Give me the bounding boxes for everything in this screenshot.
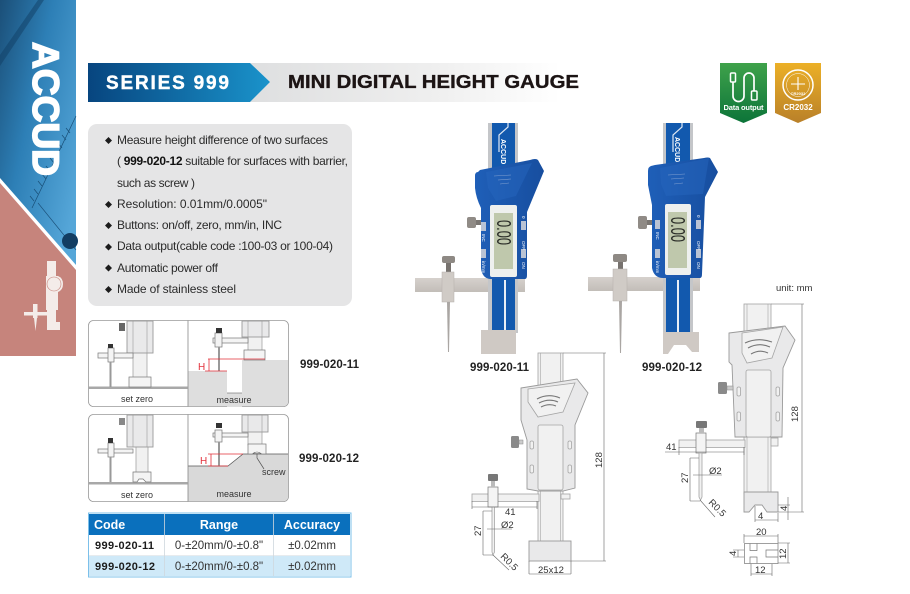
feature list: Made of stainless steel [117,282,236,296]
product photo: 999-020-11: ON [521,262,526,269]
feature list: Measure height difference of two surfaces [117,133,328,147]
dimensions [472,353,606,576]
table row 1: ±0.02mm [288,540,336,552]
table row 2 [95,561,336,573]
series banner: SERIES 999 [106,73,229,94]
table row 1: 0-±20mm/0-±0.8" [175,540,263,552]
technical drawing: 999-020-12 [665,304,804,576]
dimensions: 25x12 [538,565,564,576]
product photo: 999-020-11: in/mm [481,261,486,274]
feature badge: CR2032 battery: CR2032 [791,91,806,96]
product photo: 999-020-12: 0 [696,215,701,218]
measure gauge with screw: measure [216,489,252,499]
sidebar brand strip [0,0,78,356]
panel: usage diagram 999-020-12 [88,414,288,502]
product photo: 999-020-12 [588,123,718,354]
measure gauge with height H: measure [216,395,252,405]
dimensions: 12 [778,548,789,559]
table header: Code [94,518,125,532]
panel: features [88,124,352,306]
label: photo 999-020-11: 999-020-11 [470,362,530,374]
measure gauge with screw: H [200,456,207,467]
set zero gauge [88,415,188,500]
dimensions: 41 [666,442,677,453]
feature list: Automatic power off [117,261,219,275]
product photo: 999-020-12: 0.00 [666,217,688,242]
feature badge: CR2032 battery [775,63,821,123]
feature list: Data output(cable code :100-03 or 100-04) [117,239,333,253]
logo: ACCUD: ACCUD [25,42,66,176]
dimensions: R0.5 [706,497,728,519]
dimensions: R0.5 [498,551,520,573]
feature list: ( 999-020-12 suitable for surfaces with barrier, [117,154,348,168]
dimensions: 4 [728,551,739,556]
product photo: 999-020-11: ACCUD [499,139,506,164]
set zero gauge [88,321,188,404]
table header: Accuracy [284,518,340,532]
dimensions: 27 [473,525,484,536]
dimensions: 20 [756,527,767,538]
measure gauge with screw: screw [262,467,286,477]
dimensions: 27 [680,472,691,483]
table row 2: ±0.02mm [288,561,336,573]
table row 1: 999-020-11 [95,540,154,552]
dimensions: Ø2 [709,466,722,477]
set zero gauge: set zero [121,490,153,500]
feature badge: data output: Data output [724,103,764,112]
unit note: unit: mm [776,283,813,294]
product photo: 999-020-12: INC [655,232,660,240]
label: 999-020-12: 999-020-12 [299,453,359,465]
dimensions: 128 [594,452,605,468]
table row 1 [95,540,336,552]
measure gauge with screw [200,415,286,499]
product photo: 999-020-12: in/mm [655,261,660,274]
product photo: 999-020-12: OFF [696,241,701,250]
dimensions: Ø2 [501,520,514,531]
table row 2: 0-±20mm/0-±0.8" [175,561,263,573]
set zero gauge: set zero [121,394,153,404]
dimensions: 128 [790,406,801,422]
dimensions [665,304,804,576]
product photo: 999-020-11: 0 [521,216,526,219]
product photo: 999-020-12: ON [696,262,701,269]
dimensions: 4 [779,506,790,511]
product photo: 999-020-11: OFF [521,241,526,250]
label: photo 999-020-12: 999-020-12 [642,362,702,374]
product photo: 999-020-11: 0.00 [492,220,514,245]
feature list: such as screw ) [117,176,195,190]
label: 999-020-11: 999-020-11 [300,359,360,371]
icon: height gauge silhouette [24,261,63,331]
feature list: Buttons: on/off, zero, mm/in, INC [117,218,282,232]
feature badge: data output [720,63,767,123]
panel: usage diagram 999-020-11 [88,320,288,407]
feature list: Resolution: 0.01mm/0.0005" [117,197,267,211]
top view of base [744,544,778,564]
dimensions: 41 [505,507,516,518]
feature list [105,133,348,296]
product photo: 999-020-11 [415,123,544,354]
dimensions: 4 [758,511,763,522]
dimensions: 12 [755,565,766,576]
table header [94,518,340,532]
measure gauge with height H [198,321,269,405]
table row 2: 999-020-12 [95,561,155,573]
series banner [88,63,560,102]
spec table [88,513,351,577]
title: MINI DIGITAL HEIGHT GAUGE [288,72,579,92]
product photo: 999-020-11: INC [481,234,486,242]
technical drawing: 999-020-11 [472,353,606,576]
product photo: 999-020-12: ACCUD [673,137,680,162]
table header: Range [200,518,238,532]
feature badge: CR2032 battery: CR2032 [783,103,813,112]
measure gauge with height H: H [198,362,205,373]
